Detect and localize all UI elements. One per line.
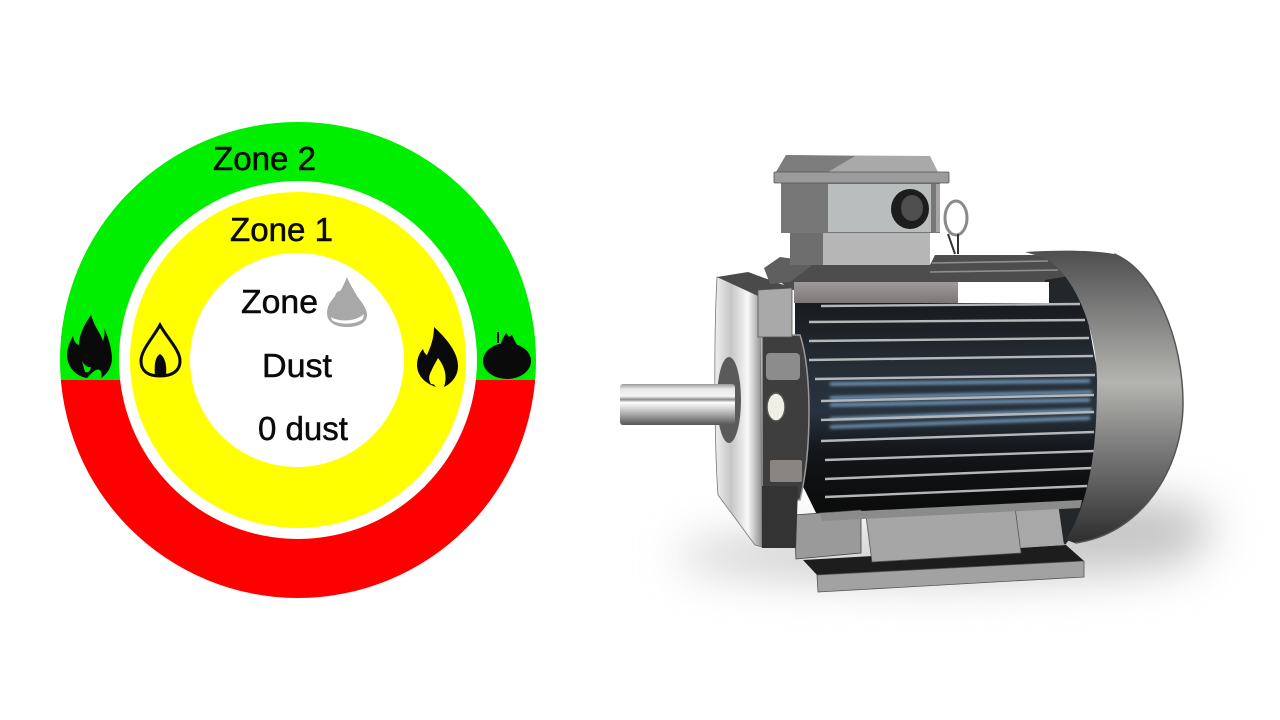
flange top face bbox=[717, 272, 792, 296]
shaft bbox=[620, 384, 735, 425]
ring: red lower half bbox=[60, 380, 536, 598]
junction box neck bbox=[790, 233, 930, 265]
icon: grey flame drop bbox=[327, 277, 367, 327]
upper boss bbox=[766, 353, 800, 380]
label: Zone: Zone bbox=[241, 283, 318, 320]
cable gland bbox=[891, 189, 929, 229]
label: 0 dust: 0 dust bbox=[258, 410, 348, 447]
lower boss bbox=[770, 460, 802, 482]
label: Zone 1: Zone 1 bbox=[230, 211, 333, 248]
blue sheen on fins bbox=[830, 381, 1092, 427]
flange plate bbox=[715, 277, 762, 547]
white separator ring bbox=[119, 181, 477, 539]
label: Dust: Dust bbox=[262, 347, 332, 384]
bearing highlight bbox=[767, 393, 785, 421]
icon: black flame on green bbox=[67, 315, 112, 378]
upper end block bbox=[758, 288, 792, 337]
zone diagram bbox=[60, 122, 536, 598]
lifting eye bbox=[945, 201, 967, 254]
base plate bbox=[803, 545, 1084, 592]
junction box body bbox=[781, 183, 940, 233]
label: Zone 2: Zone 2 bbox=[213, 140, 316, 177]
top dark housing band bbox=[764, 255, 1070, 290]
lower end block bbox=[762, 486, 798, 548]
inner white circle bbox=[190, 253, 404, 467]
white label panel bbox=[958, 282, 1049, 303]
flange bore bbox=[717, 357, 741, 443]
ring: green upper half bbox=[60, 122, 536, 380]
fan cover bbox=[1025, 251, 1183, 543]
end bell bbox=[762, 335, 809, 500]
dark rear collar bbox=[1040, 275, 1100, 545]
junction box lid bbox=[774, 155, 949, 183]
mounting feet bbox=[794, 503, 1064, 562]
ring: yellow bbox=[130, 192, 466, 528]
lower fin strip bbox=[820, 500, 1082, 521]
ground shadow bbox=[675, 498, 1215, 582]
icon: black flame on yellow bbox=[417, 327, 458, 387]
fan cover rim bbox=[1075, 254, 1183, 543]
icon: outlined drop flame bbox=[141, 325, 180, 376]
cooling fins bbox=[809, 304, 1095, 497]
cooling fin body bbox=[795, 303, 1097, 521]
cable clamp bbox=[764, 257, 816, 284]
electric motor bbox=[620, 155, 1215, 592]
icon: black bomb bbox=[483, 332, 531, 379]
grey side band bbox=[794, 282, 958, 303]
top band highlights bbox=[930, 261, 1058, 272]
